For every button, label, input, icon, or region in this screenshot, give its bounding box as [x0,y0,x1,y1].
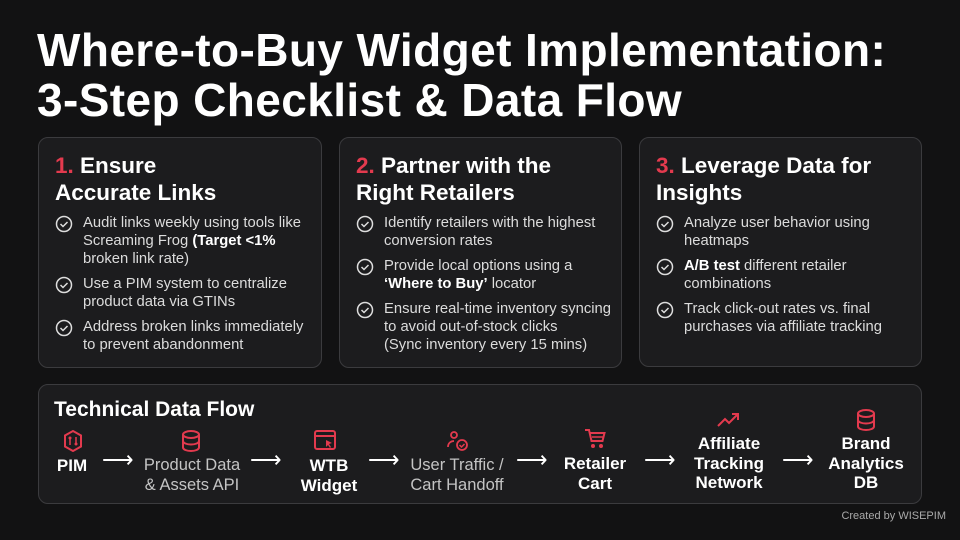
bullets 3: A/B test different retailer combinations [684,258,847,292]
heading 1: Accurate Links [55,180,216,205]
heading 3: 3. Leverage Data for [656,153,871,178]
flow: Retailer Cart: Retailer [564,454,626,473]
flow: Affiliate Tracking: Affiliate [698,434,760,453]
heading 1: 1. Ensure [55,153,156,178]
title: 3-Step Checklist & Data Flow [37,74,682,126]
icon: analytics db [857,409,875,431]
bullets 1: Use a PIM system to centralize product data via GTINs [83,276,287,310]
flow: Retailer Cart [564,454,626,492]
credit: Created by WISEPIM [841,510,946,522]
bullets 2: Provide local options using a ‘Where to Buy’ locator [384,258,572,292]
heading 2: Right Retailers [356,180,515,205]
panel: partner with retailers [339,137,622,368]
flow: Affiliate Tracking: Tracking [694,454,764,472]
arrow 3: ⟶ [368,447,400,472]
bullets 2: (Sync inventory every 15 mins) [384,337,587,353]
flow: Retailer Cart: Cart [578,474,612,492]
bullets 1: Address broken links immediately to prevent abandonment [83,319,303,353]
heading 2: 2. Partner with the [356,153,551,178]
flow: Brand Analytics DB: DB [854,473,878,492]
flow: WTB Widget: Widget [301,476,357,494]
arrow 4: ⟶ [516,447,548,472]
flow: User Traffic: User Traffic / [410,456,504,474]
bullets 2: Identify retailers with the highest conversion rates [384,215,595,249]
icon: widget [314,430,336,450]
flow: User Traffic [410,456,504,494]
bullets 3: Track click-out rates vs. final purchases via affiliate tracking [684,301,882,335]
flow heading: Technical Data Flow [54,398,254,421]
flow: Product Data API: & Assets API [145,476,239,494]
flow: Product Data API: Product Data [144,456,240,474]
title [37,24,886,126]
bullets 3: Analyze user behavior using heatmaps [684,215,870,249]
icon: PIM [64,430,82,452]
arrow 6: ⟶ [782,447,814,472]
flow: Product Data API [144,456,240,494]
icon: trend [717,413,739,427]
flow: PIM: PIM [57,456,87,475]
flow: Brand Analytics DB: Brand [841,434,891,453]
icon: user traffic [447,431,468,451]
icon: database [182,430,200,452]
icon: cart [585,429,606,448]
heading 1 [55,153,216,205]
flow: WTB Widget: WTB [310,456,348,475]
bullets 3 [656,215,882,335]
bullets 1 [56,215,304,353]
panel: ensure accurate links [38,137,322,368]
title: Where-to-Buy Widget Implementation: [37,24,886,76]
panel: technical data flow [38,384,922,504]
heading 3 [656,153,871,205]
arrow 5: ⟶ [644,447,676,472]
arrow 1: ⟶ [102,447,134,472]
flow: Brand Analytics DB: Analytics [828,454,904,472]
heading 2 [356,153,551,205]
bullets 1: Audit links weekly using tools like Screaming Frog (Target <1% broken link rate) [83,215,301,267]
flow: User Traffic: Cart Handoff [410,476,504,494]
flow: Affiliate Tracking [694,434,764,492]
bullets 2: Ensure real-time inventory syncing to avoid out-of-stock clicks [384,301,611,335]
panel: leverage data [639,137,922,367]
bullets 2 [356,215,611,353]
flow: Affiliate Tracking: Network [695,473,763,492]
flow: Brand Analytics DB [828,434,904,492]
arrow 2: ⟶ [250,447,282,472]
flow: WTB Widget [300,456,358,494]
heading 3: Insights [656,180,742,205]
